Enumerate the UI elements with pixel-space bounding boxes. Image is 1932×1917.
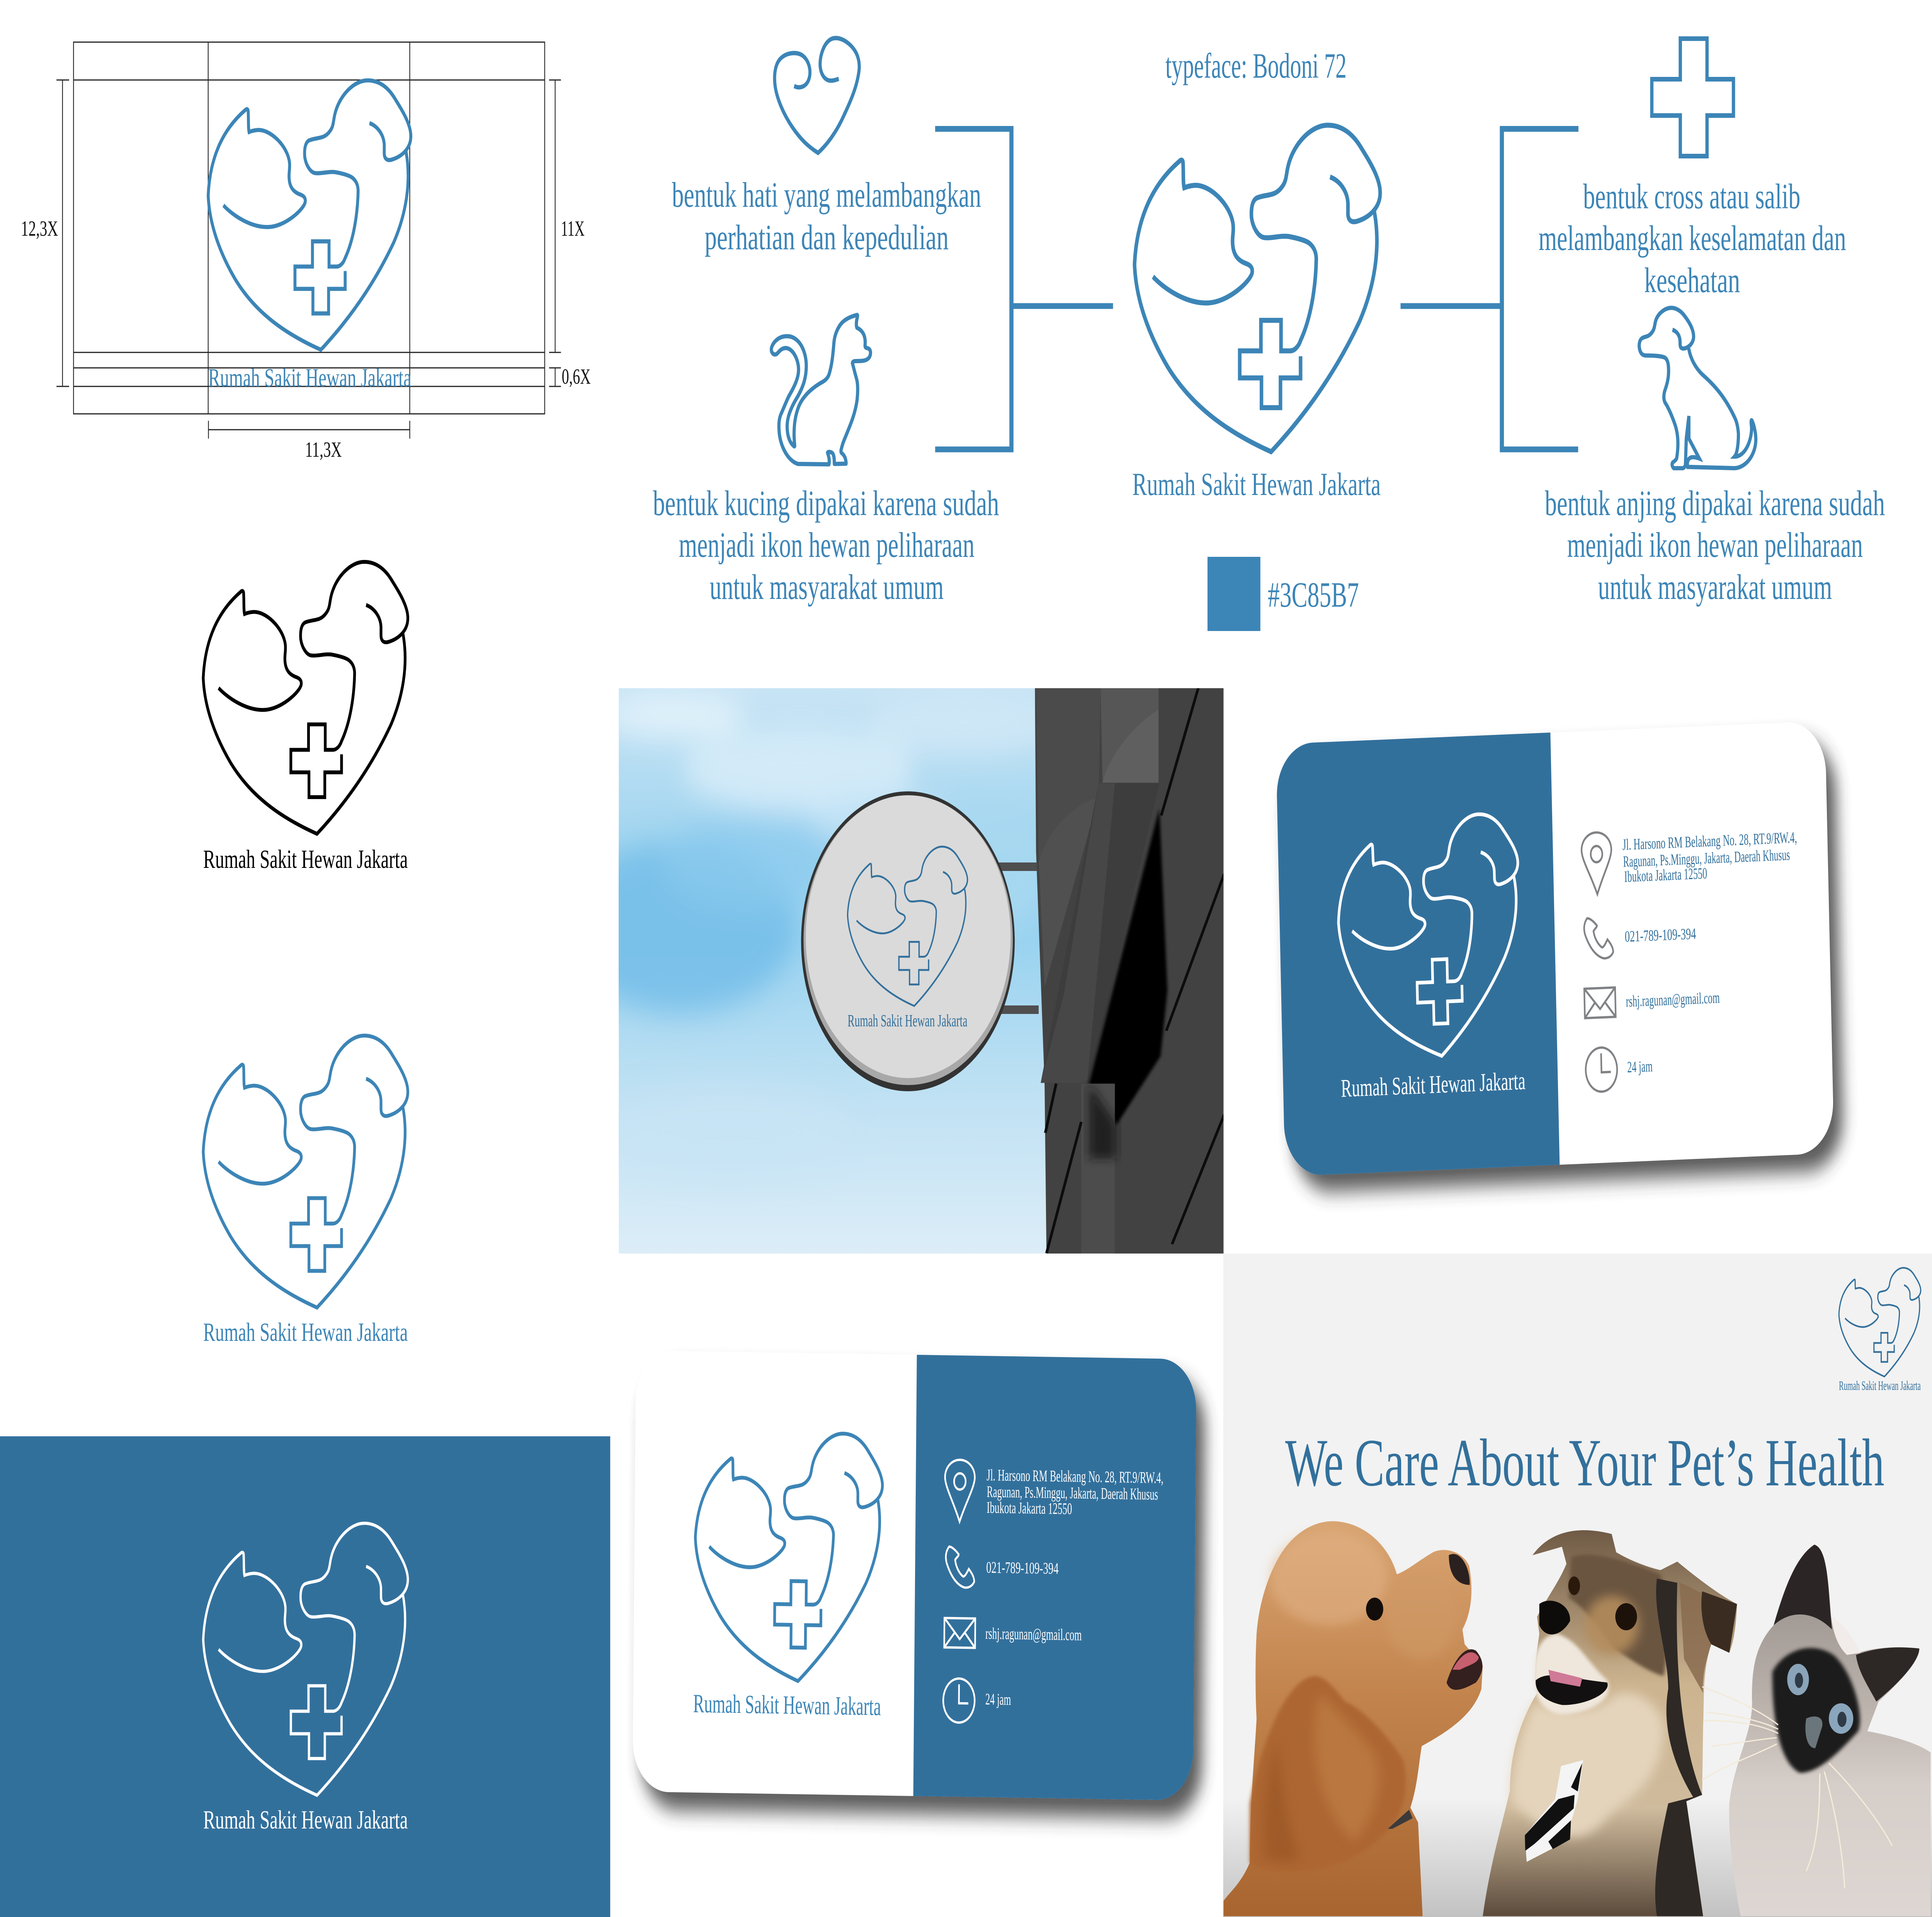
text: cat explanation: untuk masyarakat umum bbox=[710, 568, 944, 607]
contact details bbox=[985, 1466, 1163, 1711]
text: dog explanation bbox=[1545, 484, 1885, 607]
panel: business card front tilted bbox=[632, 1349, 1206, 1818]
panel: business card front tilted: Rumah Sakit Hewan Jakarta bbox=[693, 1689, 881, 1721]
text: cross explanation: kesehatan bbox=[1644, 261, 1740, 300]
panel: signage mockup bbox=[565, 688, 1226, 1257]
logo: main primary bbox=[1132, 125, 1381, 502]
contact details: 021-789-109-394 bbox=[1624, 925, 1696, 946]
color swatch bbox=[1208, 557, 1359, 631]
contact icons bbox=[1581, 832, 1617, 1092]
text: dog explanation: bentuk anjing dipakai karena sudah bbox=[1545, 484, 1885, 523]
building bbox=[1035, 688, 1226, 1257]
text: cat explanation: bentuk kucing dipakai karena sudah bbox=[653, 484, 999, 523]
panel: logo white on blue: Rumah Sakit Hewan Jakarta bbox=[203, 1805, 408, 1834]
panel: business card back tilted: Rumah Sakit Hewan Jakarta bbox=[1341, 1067, 1526, 1103]
logo: black version bbox=[203, 562, 408, 874]
logo: blue version: Rumah Sakit Hewan Jakarta bbox=[203, 1317, 408, 1347]
panel: logo construction grid: Rumah Sakit Hewan Jakarta bbox=[208, 363, 412, 392]
sign disc bbox=[801, 791, 1015, 1091]
contact details: Jl. Harsono RM Belakang No. 28, RT.9/RW.4, bbox=[986, 1466, 1163, 1487]
text: dog explanation: untuk masyarakat umum bbox=[1598, 568, 1832, 607]
text: cross explanation bbox=[1539, 177, 1846, 300]
text: cat explanation bbox=[653, 484, 999, 607]
text: typeface label: typeface: Bodoni 72 bbox=[1165, 46, 1347, 86]
necktie bbox=[1525, 1760, 1583, 1862]
text: dog explanation: menjadi ikon hewan peliharaan bbox=[1567, 526, 1863, 565]
panel: logo construction grid: 0,6X bbox=[562, 364, 591, 389]
panel: logo white on blue bbox=[0, 1436, 610, 1917]
contact details: Ibukota Jakarta 12550 bbox=[986, 1499, 1072, 1518]
contact icons bbox=[943, 1459, 976, 1723]
text: heart explanation bbox=[672, 175, 981, 257]
poster headline: We Care About Your Pet’s Health bbox=[1285, 1425, 1884, 1500]
logo: black version: Rumah Sakit Hewan Jakarta bbox=[203, 844, 408, 874]
contact details: 021-789-109-394 bbox=[986, 1558, 1059, 1577]
icon: cross element bbox=[1652, 39, 1733, 156]
panel: pets poster bbox=[1223, 1254, 1932, 1917]
contact details: Ibukota Jakarta 12550 bbox=[1624, 864, 1708, 886]
arrow: right bracket connector bbox=[1401, 129, 1578, 449]
text: cat explanation: menjadi ikon hewan peliharaan bbox=[679, 526, 975, 565]
panel: business card back tilted bbox=[1275, 720, 1844, 1193]
contact details bbox=[1622, 828, 1802, 1076]
panel: signage mockup: Rumah Sakit Hewan Jakarta bbox=[848, 1012, 968, 1030]
logo: main primary: Rumah Sakit Hewan Jakarta bbox=[1132, 466, 1381, 502]
contact details: 24 jam bbox=[985, 1690, 1011, 1708]
logo: blue version bbox=[203, 1036, 408, 1347]
text: cross explanation: bentuk cross atau salib bbox=[1583, 177, 1800, 216]
text: cross explanation: melambangkan keselamatan dan bbox=[1539, 219, 1846, 258]
illustration: siamese cat bbox=[1702, 1544, 1930, 1916]
contact details: rshj.ragunan@gmail.com bbox=[985, 1624, 1082, 1644]
panel: logo construction grid bbox=[21, 42, 591, 462]
sign mounting rods bbox=[997, 862, 1037, 871]
icon: cat element bbox=[771, 315, 871, 464]
icon: heart element bbox=[775, 38, 859, 153]
text: heart explanation: perhatian dan kepedulian bbox=[705, 218, 949, 257]
icon: dog element bbox=[1639, 308, 1756, 468]
contact details: 24 jam bbox=[1627, 1057, 1653, 1076]
illustration: mixed dog with tie bbox=[1483, 1530, 1737, 1916]
color swatch: #3C85B7 bbox=[1268, 575, 1359, 615]
panel: logo construction grid: 12,3X bbox=[21, 216, 58, 241]
panel: logo construction grid: 11,3X bbox=[305, 437, 342, 462]
panel: logo construction grid: 11X bbox=[561, 216, 585, 241]
contact details: Jl. Harsono RM Belakang No. 28, RT.9/RW.4, bbox=[1622, 828, 1797, 854]
contact details: Ragunan, Ps.Minggu, Jakarta, Daerah Khusus bbox=[987, 1483, 1158, 1503]
text: heart explanation: bentuk hati yang melambangkan bbox=[672, 175, 981, 215]
arrow: left bracket connector bbox=[935, 129, 1113, 449]
illustration: poodle bbox=[1224, 1521, 1483, 1916]
contact details: rshj.ragunan@gmail.com bbox=[1626, 988, 1720, 1010]
contact details: Ragunan, Ps.Minggu, Jakarta, Daerah Khusus bbox=[1623, 845, 1790, 871]
